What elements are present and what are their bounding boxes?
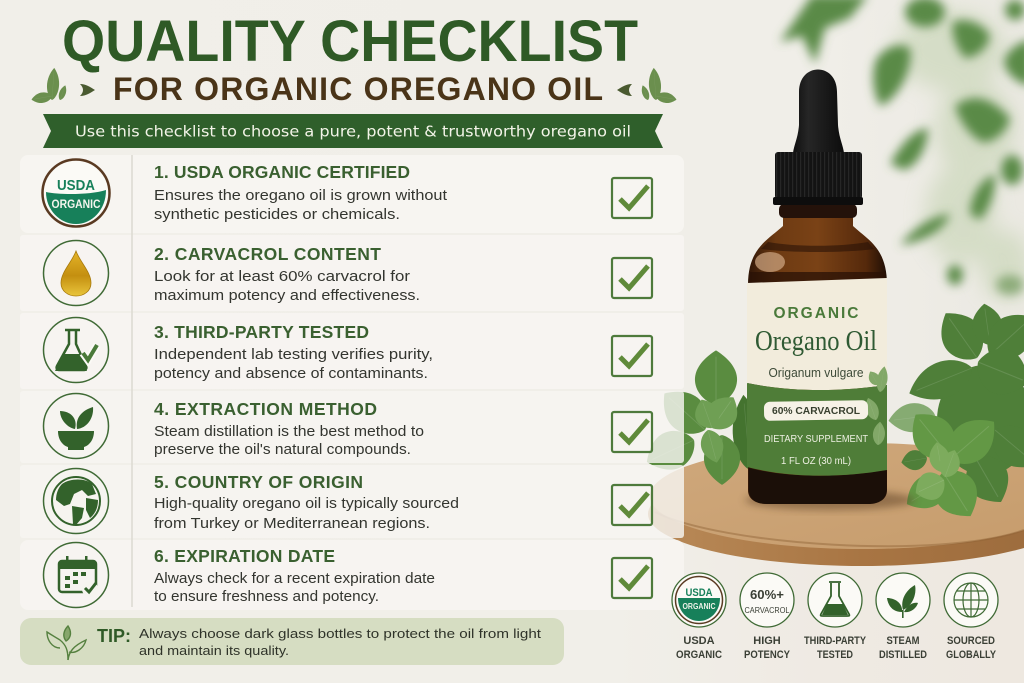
subtitle: FOR ORGANIC OREGANO OIL xyxy=(113,71,603,107)
glass shoulder shadow xyxy=(761,242,874,252)
label: product name: Oregano Oil xyxy=(755,325,877,357)
item 3 text: potency and absence of contaminants. xyxy=(154,366,428,382)
row 2 background xyxy=(20,235,684,311)
item 1 text: Ensures the oregano oil is grown without xyxy=(154,188,447,204)
item 1 text: synthetic pesticides or chemicals. xyxy=(154,207,400,223)
item 4 text: Steam distillation is the best method to xyxy=(154,424,424,440)
icon: USDA organic seal: ORGANIC xyxy=(52,197,101,211)
checkbox 1 xyxy=(612,178,652,218)
checkbox 6 xyxy=(612,558,652,598)
item 1 text xyxy=(154,162,447,223)
item 5 text: from Turkey or Mediterranean regions. xyxy=(154,516,430,532)
dropper bulb xyxy=(793,70,844,153)
tip text: Always choose dark glass bottles to protect the oil from light xyxy=(139,626,541,641)
glass highlight xyxy=(755,252,785,272)
row 1 background xyxy=(20,155,684,233)
item 3 text: Independent lab testing verifies purity, xyxy=(154,347,433,363)
row 4 background xyxy=(20,391,684,463)
badge: USDA organic: USDA xyxy=(686,587,713,599)
item 5 text: 5. COUNTRY OF ORIGIN xyxy=(154,472,363,492)
icon: lab flask xyxy=(44,318,108,382)
item 6 text: to ensure freshness and potency. xyxy=(154,589,379,605)
checkbox 4 xyxy=(612,412,652,452)
badge: USDA organic: USDA xyxy=(683,635,715,647)
item 6 text: Always check for a recent expiration date xyxy=(154,571,435,587)
badge: high potency: HIGH xyxy=(753,635,781,647)
icon: USDA organic seal xyxy=(42,160,110,226)
badge: high potency: POTENCY xyxy=(744,649,791,661)
dropper bottle xyxy=(745,70,915,510)
item 2 text: maximum potency and effectiveness. xyxy=(154,288,420,304)
left leaf ornament xyxy=(31,67,95,105)
label leaf art xyxy=(862,365,890,446)
oregano sprig right xyxy=(887,302,1024,527)
icon: oil drop xyxy=(44,240,108,306)
item 4 text: 4. EXTRACTION METHOD xyxy=(154,399,377,419)
badge: steam distilled: DISTILLED xyxy=(879,649,927,661)
icon: USDA organic seal: USDA xyxy=(57,177,95,194)
badge: sourced globally xyxy=(944,573,998,661)
background floor xyxy=(0,540,1024,683)
badge: steam distilled: STEAM xyxy=(886,635,920,647)
item 5 text: High-quality oregano oil is typically sourced xyxy=(154,496,459,512)
item 3 text xyxy=(154,322,433,382)
oregano sprig left xyxy=(639,350,764,485)
neck ring xyxy=(779,204,857,218)
item 1 text: 1. USDA ORGANIC CERTIFIED xyxy=(154,162,410,182)
tip callout xyxy=(20,618,564,665)
badge: third-party tested: TESTED xyxy=(817,649,853,661)
row 6 background xyxy=(20,540,684,610)
item 2 text: Look for at least 60% carvacrol for xyxy=(154,269,410,285)
badge: USDA organic: ORGANIC xyxy=(676,649,722,661)
badge: sourced globally: GLOBALLY xyxy=(946,649,997,661)
icon: leaves in bowl xyxy=(44,394,108,458)
blurred oregano foliage xyxy=(780,0,1024,300)
item 5 text xyxy=(154,472,459,532)
label green xyxy=(747,383,887,476)
checkbox 3 xyxy=(612,336,652,376)
label: carvacrol pill xyxy=(764,400,868,421)
badge: high potency xyxy=(740,573,794,661)
cap flange xyxy=(773,197,863,205)
label: latin name: Origanum vulgare xyxy=(768,366,864,380)
item 2 text: 2. CARVACROL CONTENT xyxy=(154,244,381,264)
ribbon banner: Use this checklist to choose a pure, potent & trustworthy oregano oil xyxy=(75,122,631,140)
checklist panel xyxy=(20,155,684,610)
right leaf ornament xyxy=(617,67,677,105)
badge: steam distilled xyxy=(876,573,930,661)
item 4 text: preserve the oil's natural compounds. xyxy=(154,442,411,458)
bottle base xyxy=(749,468,886,504)
tip callout: and maintain its quality. xyxy=(139,643,289,658)
badge: third-party tested xyxy=(804,573,867,661)
tip label: TIP: xyxy=(97,625,131,646)
item 2 text xyxy=(154,244,420,304)
ribbon banner xyxy=(43,114,663,148)
item 4 text xyxy=(154,399,424,458)
row 3 background xyxy=(20,313,684,389)
badge: high potency: CARVACROL xyxy=(744,605,790,615)
label cream xyxy=(747,278,887,390)
item 3 text: 3. THIRD-PARTY TESTED xyxy=(154,322,369,342)
badge: third-party tested: THIRD-PARTY xyxy=(804,635,867,647)
label: volume: 1 FL OZ (30 mL) xyxy=(781,456,851,467)
item 6 text xyxy=(154,546,435,605)
label: organic: ORGANIC xyxy=(774,305,858,322)
glass lower shadow xyxy=(749,272,886,284)
icon: calendar xyxy=(44,542,108,608)
badge: high potency: 60%+ xyxy=(750,587,784,602)
amber glass body xyxy=(748,215,887,504)
item 6 text: 6. EXPIRATION DATE xyxy=(154,546,335,566)
checkbox 2 xyxy=(612,258,652,298)
ribbed cap xyxy=(775,152,862,199)
wooden board xyxy=(648,443,1024,566)
row 5 background xyxy=(20,465,684,538)
checkbox 5 xyxy=(612,485,652,525)
badge: sourced globally: SOURCED xyxy=(947,635,995,647)
label: carvacrol pill: 60% CARVACROL xyxy=(772,405,861,417)
title: QUALITY CHECKLIST xyxy=(62,9,638,74)
badge: USDA organic: ORGANIC xyxy=(682,602,716,611)
label: dietary supplement: DIETARY SUPPLEMENT xyxy=(764,434,868,445)
icon: tip sprig xyxy=(47,626,86,660)
badge: USDA organic xyxy=(672,573,726,661)
icon: globe xyxy=(44,468,108,534)
